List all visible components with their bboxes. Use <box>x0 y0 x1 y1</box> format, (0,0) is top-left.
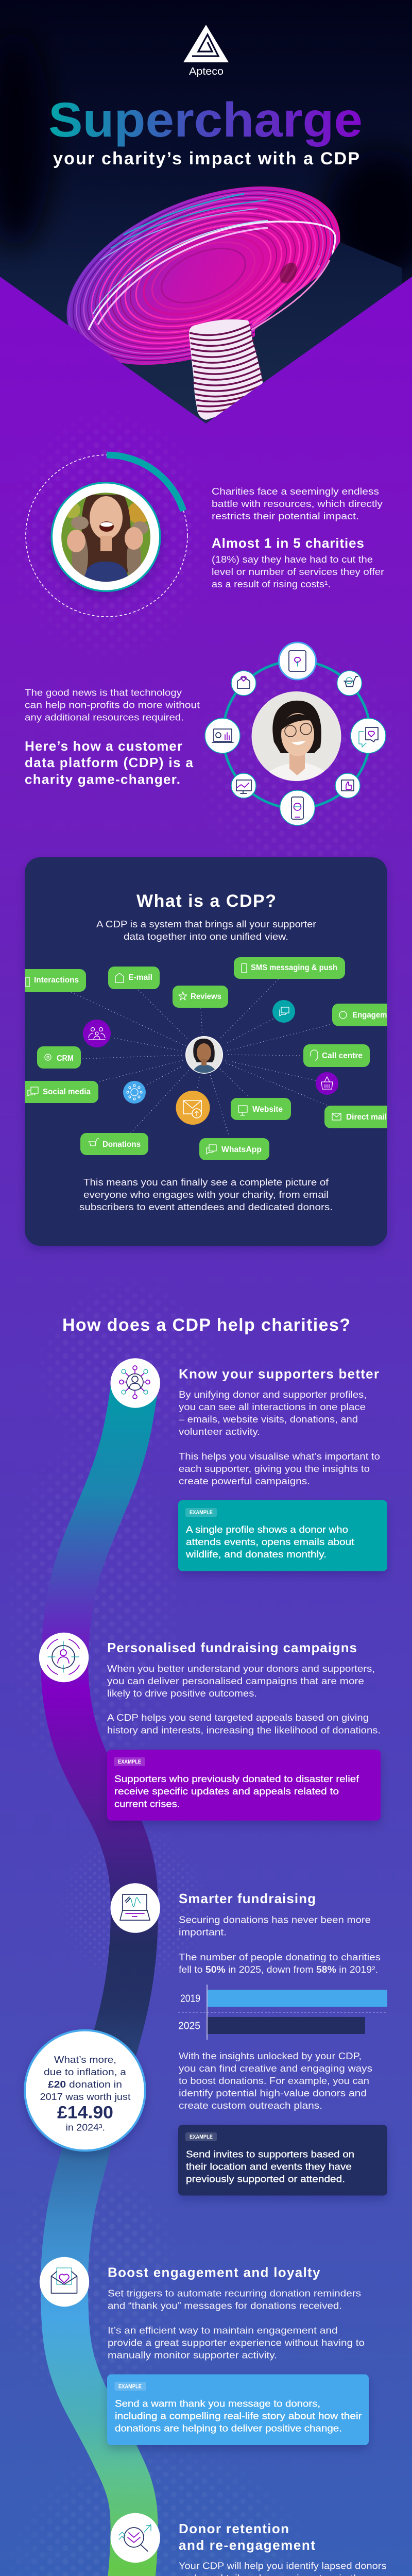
text: complete picture: This means you can finally see a complete picture of <box>83 1177 329 1188</box>
text: definition <box>96 919 316 942</box>
title: your charity’s impact with a CDP <box>53 149 359 168</box>
stat: almost 1 in 5 charities <box>212 535 384 589</box>
icon circle: purple people <box>83 1020 111 1047</box>
example card: current crises. <box>114 1799 180 1809</box>
example card <box>107 1750 381 1821</box>
icon: chat heart <box>351 718 386 753</box>
text: history and interests, increasing the likelihood of donations. <box>107 1725 381 1735</box>
heading: Personalised fundraising campaigns <box>107 1640 357 1655</box>
text: and “thank you” messages for donations received. <box>108 2301 342 2311</box>
channel: CRM: CRM <box>57 1054 74 1063</box>
icon: laptop analytics <box>205 718 240 753</box>
channel: e-mail: E-mail <box>128 973 152 982</box>
diagram: data channels into one profile <box>15 957 399 1160</box>
heading: game-changer: Here’s how a customer <box>25 738 182 754</box>
example card <box>178 2125 387 2196</box>
text: manually monitor supporter activity. <box>108 2350 277 2360</box>
example card: Supporters who previously donated to disaster relief <box>114 1774 359 1784</box>
heading: game-changer <box>25 738 194 787</box>
example card: receive specific updates and appeals related to <box>114 1786 339 1797</box>
section: personalised fundraising campaigns <box>39 1633 381 1821</box>
icon circle: orange mail <box>176 1091 210 1125</box>
text: When you better understand your donors and supporters, <box>107 1664 375 1674</box>
text <box>179 1389 380 1486</box>
text: fell to 50% in 2025, down from 58% in 2019². <box>179 1964 378 1975</box>
icon circle: basket <box>316 1072 338 1095</box>
channel: call centre <box>303 1044 370 1067</box>
text: each supporter, giving you the insights to <box>179 1464 370 1474</box>
channel: SMS <box>234 957 345 979</box>
text: This helps you visualise what’s important to <box>179 1451 380 1462</box>
icon: supporter network <box>111 1358 160 1408</box>
example card: Send invites to supporters based on <box>186 2149 354 2159</box>
text: The number of people donating to charities <box>179 1952 381 1962</box>
heading: game-changer: data platform (CDP) is a <box>25 755 194 770</box>
stat: almost 1 in 5 charities: (18%) say they have had to cut the <box>212 554 373 565</box>
heading: Smarter fundraising <box>179 1891 316 1906</box>
icon circle: blue network <box>123 1081 146 1104</box>
icon: monitor chart <box>231 773 256 798</box>
callout: inflation: in 2024³. <box>66 2123 105 2133</box>
example card: previously supported or attended. <box>186 2174 345 2184</box>
channel: donations <box>80 1133 148 1155</box>
icon: heart letter <box>40 2257 89 2307</box>
callout: inflation: What’s more, <box>54 2055 116 2065</box>
text: likely to drive positive outcomes. <box>107 1688 257 1699</box>
text: complete picture <box>79 1177 333 1212</box>
callout: inflation <box>25 2030 145 2150</box>
icon: email heart <box>231 671 256 696</box>
text: good news: can help non-profits do more without <box>25 700 200 710</box>
channel: engagement <box>332 1004 387 1026</box>
hero photo: spinning fairground ride <box>0 0 412 428</box>
heading: Boost engagement and loyalty <box>108 2265 320 2280</box>
channel: interactions: Interactions <box>34 976 79 985</box>
example card: A single profile shows a donor who <box>186 1524 348 1535</box>
text: resource battle: battle with resources, which directly <box>212 499 383 509</box>
callout: inflation: 2017 was worth just <box>40 2092 130 2102</box>
callout: inflation: £20 donation in <box>48 2079 122 2090</box>
bar chart: donating 2019 vs 2025: 2019 <box>180 1993 200 2004</box>
channel: whatsapp <box>199 1138 269 1160</box>
heading: game-changer: charity game-changer. <box>25 771 180 787</box>
text: you can find creative and engaging ways <box>179 2063 372 2074</box>
example card: wildlife, and donates monthly. <box>185 1549 327 1560</box>
icon: magnifier with chevrons <box>111 2513 160 2563</box>
text: create custom outreach plans. <box>179 2100 322 2111</box>
text: important. <box>179 1927 227 1938</box>
icon: target person <box>39 1633 89 1682</box>
example card: EXAMPLE <box>118 2383 142 2389</box>
text: resource battle <box>212 486 383 521</box>
text: A CDP helps you send targeted appeals based on giving <box>107 1713 369 1723</box>
stat: almost 1 in 5 charities: Almost 1 in 5 charities <box>212 535 364 551</box>
title: Supercharge <box>48 93 363 147</box>
logo: Apteco: Apteco <box>189 66 224 77</box>
channel: website <box>231 1098 291 1120</box>
example card: including a compelling real-life story about how their <box>115 2411 362 2421</box>
example card: EXAMPLE <box>190 1510 213 1516</box>
heading: Donor retention <box>179 2521 289 2536</box>
text: provide a great supporter experience without having to <box>108 2338 365 2348</box>
heading: Know your supporters better <box>179 1366 379 1382</box>
text: volunteer activity. <box>179 1427 260 1437</box>
text: good news: The good news is that technology <box>25 688 182 698</box>
text <box>179 1915 381 1975</box>
heading: how does a CDP help: How does a CDP help charities? <box>62 1315 350 1335</box>
channel: reviews: Reviews <box>191 992 221 1001</box>
icon: shopping cart <box>337 671 362 696</box>
channel: interactions <box>25 969 86 992</box>
bar chart: donating 2019 vs 2025: 2025 <box>178 2021 200 2032</box>
example card: Send a warm thank you message to donors, <box>115 2399 320 2409</box>
text: complete picture: subscribers to event attendees and dedicated donors. <box>79 1202 333 1212</box>
callout: inflation: £14.90 <box>57 2103 113 2123</box>
text: Your CDP will help you identify lapsed donors <box>179 2561 386 2571</box>
text: definition: data together into one unified view. <box>124 931 288 942</box>
text: good news <box>25 688 200 723</box>
text: – emails, website visits, donations, and <box>179 1414 358 1425</box>
panel: technology good news <box>25 642 386 825</box>
channel: donations: Donations <box>102 1140 141 1149</box>
text: Set triggers to automate recurring donation reminders <box>108 2289 361 2299</box>
channel: CRM <box>37 1046 81 1069</box>
example card <box>178 1500 387 1571</box>
heading <box>179 2521 315 2553</box>
text <box>179 2051 372 2111</box>
channel: social media <box>25 1081 98 1103</box>
panel: what is a CDP <box>15 857 399 1246</box>
photo: woman with glasses <box>251 691 341 783</box>
icon: laptop wave <box>111 1883 160 1933</box>
section: know your supporters better <box>111 1358 387 1571</box>
channel: SMS: SMS messaging & push <box>251 963 337 972</box>
example card: EXAMPLE <box>190 2134 213 2140</box>
example card <box>107 2374 369 2445</box>
text: create powerful campaigns. <box>179 1476 310 1486</box>
photo: woman holding kittens <box>51 482 161 592</box>
text: to boost donations. For example, you can <box>179 2076 369 2086</box>
channel: call centre: Call centre <box>322 1052 363 1060</box>
section: smarter fundraising <box>111 1883 387 2196</box>
text: Securing donations has never been more <box>179 1915 371 1925</box>
text: you can deliver personalised campaigns that are more <box>107 1676 364 1686</box>
icon: phone bottom <box>280 790 315 825</box>
text: With the insights unlocked by your CDP, <box>179 2051 362 2061</box>
icon: thumbs up window <box>335 773 360 798</box>
channel: engagement: Engagement <box>352 1011 399 1020</box>
progress ring <box>26 455 187 617</box>
heading: What is a CDP? <box>136 891 276 911</box>
text: By unifying donor and supporter profiles, <box>179 1389 367 1400</box>
icon circle: teal chat <box>272 1000 295 1023</box>
example card: attends events, opens emails about <box>186 1537 354 1547</box>
channel: reviews <box>173 986 228 1008</box>
example card: EXAMPLE <box>118 1759 141 1765</box>
section: donor retention <box>111 2513 387 2576</box>
channel: e-mail <box>108 967 160 989</box>
channel: whatsapp: WhatsApp <box>221 1145 262 1154</box>
channel: website: Website <box>252 1105 283 1114</box>
channel: direct mail: Direct mail <box>346 1113 387 1122</box>
text: good news: any additional resources required. <box>25 713 184 723</box>
ribbon connecting the benefits <box>36 1382 135 2576</box>
section: boost engagement and loyalty <box>40 2257 369 2445</box>
text: It’s an efficient way to maintain engagement and <box>108 2325 338 2335</box>
bar chart: donating 2019 vs 2025 <box>178 1985 387 2040</box>
text: definition: A CDP is a system that brings all your supporter <box>96 919 316 929</box>
text: complete picture: everyone who engages with your charity, from email <box>83 1190 329 1200</box>
text <box>107 1664 381 1735</box>
title <box>48 93 363 168</box>
channel: direct mail <box>324 1106 394 1128</box>
callout: inflation: due to inflation, a <box>44 2067 127 2077</box>
icon: phone upload top <box>279 642 316 680</box>
text: you can see all interactions in one place <box>179 1402 366 1412</box>
heading: and re-engagement <box>179 2537 315 2553</box>
example card: donations are helping to deliver positive change. <box>115 2424 342 2434</box>
stat: almost 1 in 5 charities: as a result of rising costs¹. <box>212 579 331 589</box>
icon ring around person <box>205 642 386 825</box>
text <box>179 2561 386 2576</box>
text: resource battle: restricts their potential impact. <box>212 511 359 521</box>
example card: their location and events they have <box>186 2161 352 2172</box>
panel: intro with kitten photo <box>26 455 384 617</box>
text: resource battle: Charities face a seemingly endless <box>212 486 379 497</box>
channel: social media: Social media <box>43 1088 91 1096</box>
photo: central supporter profile <box>185 1036 223 1074</box>
logo: Apteco <box>183 25 229 77</box>
text: identify potential high-value donors and <box>179 2088 367 2098</box>
text <box>108 2289 365 2360</box>
stat: almost 1 in 5 charities: level or number of services they offer <box>212 567 384 577</box>
